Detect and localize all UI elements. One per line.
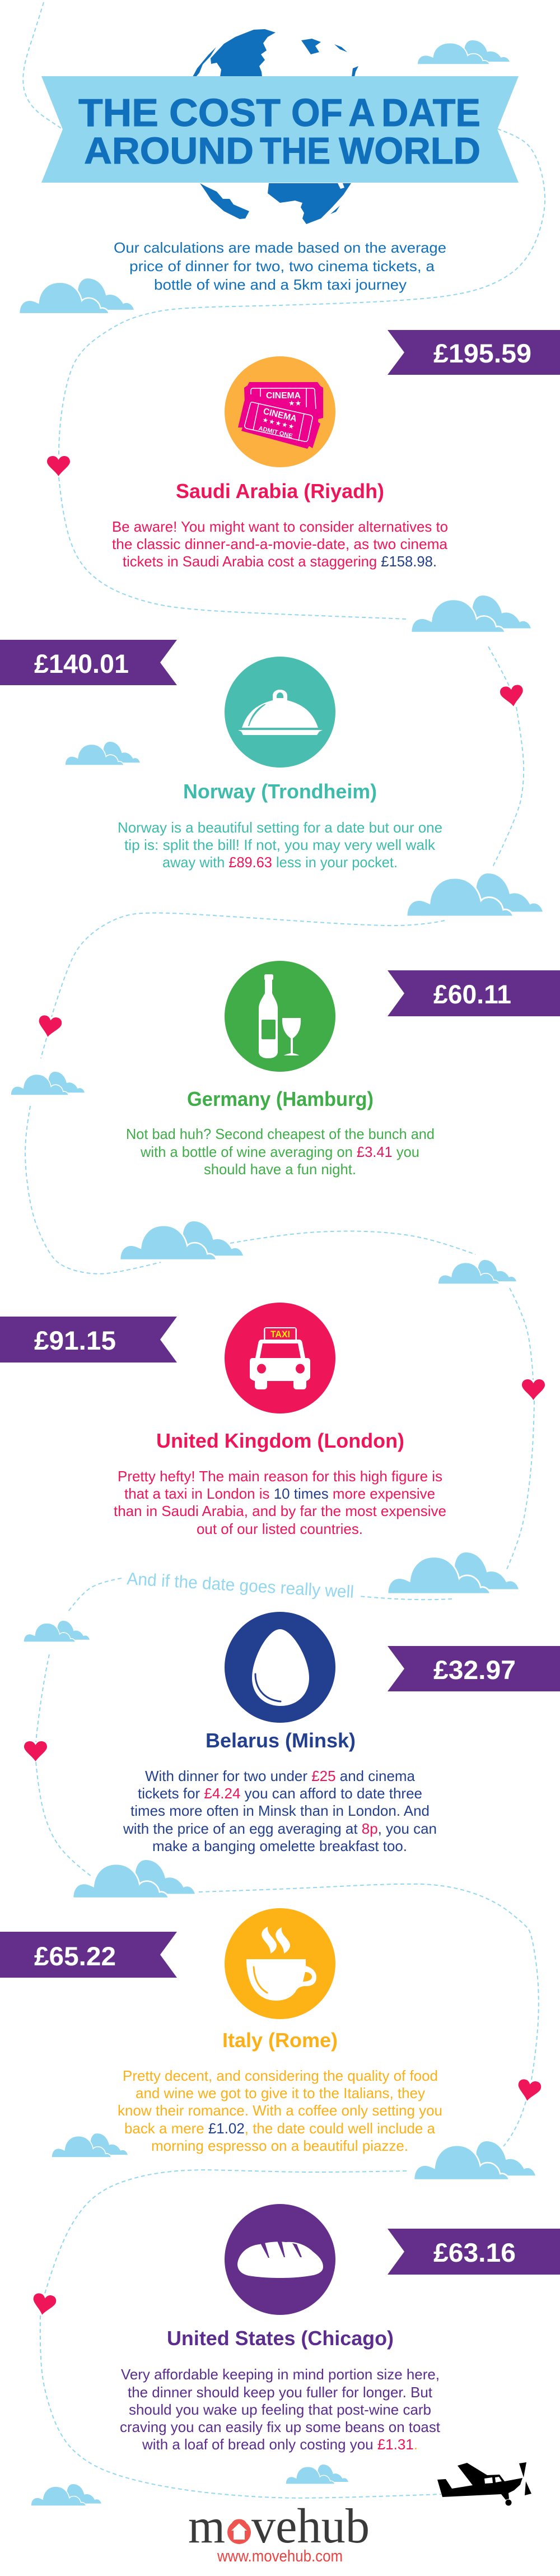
price ribbon [0,640,177,685]
icon: heart [500,684,525,708]
title: WORLD [339,130,480,172]
body text: craving you can easily fix up some beans on toast [120,2419,441,2435]
body text: With dinner for two under £25 and cinema [145,1768,416,1784]
title banner [41,76,519,183]
title: OF [291,91,343,134]
icon: globe [193,29,358,224]
body text: with a bottle of wine averaging on £3.41 you [140,1143,419,1160]
price ribbon: £63.16 [433,2238,516,2267]
icon: cinema tickets: ★★ [288,399,301,408]
price ribbon: £60.11 [433,979,511,1009]
body text: and wine we got to give it to the Italians, they [136,2085,425,2101]
cloud [411,596,531,633]
body text: morning espresso on a beautiful piazze. [151,2137,408,2154]
icon: plane [437,2462,531,2505]
panel: Italy [0,1908,442,2154]
intro text: Our calculations are made based on the average [114,239,446,256]
title: COST [169,91,281,134]
body text: know their romance. With a coffee only setting you [118,2102,442,2119]
website url: www.movehub.com [217,2547,343,2565]
title: DATE [381,91,480,134]
price ribbon: £140.01 [34,649,129,678]
heading: United Kingdom (London) [156,1429,404,1452]
price ribbon [388,970,560,1016]
cloud [388,1552,519,1594]
panel: Germany [126,961,560,1178]
intro text: price of dinner for two, two cinema tickets, a [129,258,435,275]
title [78,91,480,172]
body text: tickets for £4.24 you can afford to date three [138,1785,422,1802]
icon: heart [24,1741,47,1761]
price ribbon [388,330,560,375]
heading: Norway (Trondheim) [183,780,377,803]
cloud [24,1621,90,1642]
body text: Pretty decent, and considering the quality of food [123,2067,438,2084]
body text: out of our listed countries. [197,1521,363,1537]
body text [118,819,442,871]
price ribbon [0,1317,177,1363]
logo: movehub: vehub [251,2499,370,2554]
icon: heart [36,1015,63,1039]
body text: times more often in Minsk than in London. And [130,1802,430,1819]
heading: United States (Chicago) [167,2327,394,2350]
icon: wine bottle and glass [225,961,335,1072]
cloud [73,1860,195,1898]
body text: that a taxi in London is 10 times more expensive [124,1485,435,1502]
body text: tickets in Saudi Arabia cost a staggering £158.98. [123,553,437,570]
body text: back a mere £1.02, the date could well include a [124,2120,436,2137]
body text: away with £89.63 less in your pocket. [162,854,398,871]
body text [118,2067,442,2154]
icon: heart [31,2293,57,2317]
cloud [438,1260,516,1284]
icon: cinema tickets [225,356,335,467]
logo: movehub [188,2499,370,2554]
body text: should have a fun night. [204,1161,356,1178]
price ribbon: £32.97 [433,1655,516,1685]
icon: cloche [225,657,335,768]
panel: United States [120,2204,560,2453]
body text: Be aware! You might want to consider alternatives to [112,518,448,535]
icon: heart [522,1379,545,1400]
icon: heart [47,456,70,476]
body text: make a banging omelette breakfast too. [152,1838,407,1854]
heading: Belarus (Minsk) [206,1729,356,1752]
cloud [286,2465,348,2484]
body text: Norway is a beautiful setting for a date but our one [118,819,442,836]
body text: the classic dinner-and-a-movie-date, as two cinema [112,536,448,552]
intro text: bottle of wine and a 5km taxi journey [154,276,407,293]
body text: with the price of an egg averaging at 8p, you can [123,1820,437,1837]
heading: Italy (Rome) [222,2029,338,2052]
icon: cinema tickets: ADMIT ONE [258,425,293,440]
price ribbon [0,1932,177,1978]
cloud [11,1072,85,1095]
body text: Not bad huh? Second cheapest of the bunch and [126,1126,435,1142]
panel: Saudi Arabia [112,330,560,570]
cloud [65,742,140,765]
logo: movehub: m [188,2499,225,2554]
price ribbon: £65.22 [34,1941,116,1971]
price ribbon: £195.59 [433,338,531,368]
body text: tip is: split the bill! If not, you may very well walk [124,836,436,853]
title: THE [260,130,330,172]
logo: movehub: o [228,2499,250,2554]
cloud [52,2133,128,2157]
heading: Germany (Hamburg) [187,1087,374,1110]
body text [112,518,448,570]
icon: heart [516,2079,542,2103]
icon: cinema tickets: CINEMA [266,391,301,401]
body text: than in Saudi Arabia, and by far the most expensive [114,1503,446,1519]
title: A [348,91,375,134]
cloud [19,278,134,314]
icon: loaf of bread [225,2204,335,2315]
curved caption: And if the date goes really well [127,1569,354,1602]
body text: Pretty hefty! The main reason for this high figure is [118,1468,442,1485]
body text [123,1768,437,1854]
icon: cinema tickets: ★★★★★ [262,416,295,431]
body text: should you wake up feeling that post-wine carb [129,2401,431,2418]
body text: the dinner should keep you fuller for longer. But [128,2384,433,2401]
icon: taxi [225,1303,335,1413]
price ribbon [388,2229,560,2275]
price ribbon: £91.15 [34,1326,116,1355]
icon: taxi: TAXI [270,1329,290,1340]
price ribbon [388,1646,560,1691]
cloud [417,40,510,64]
cloud [407,873,543,917]
panel: Norway [0,640,442,871]
panel: United Kingdom [0,1303,446,1537]
cloud [31,2484,101,2506]
icon: egg [225,1612,335,1723]
body text [120,2366,441,2453]
panel: Belarus [123,1612,560,1854]
icon: coffee cup [225,1908,335,2019]
title: THE [78,91,158,134]
cloud [120,1221,243,1260]
title: AROUND [84,130,254,172]
body text [114,1468,446,1537]
intro text [114,239,446,293]
body text: with a loaf of bread only costing you £1.31. [142,2436,418,2453]
body text [126,1126,435,1178]
body text: Very affordable keeping in mind portion size here, [121,2366,440,2383]
icon: cinema tickets: CINEMA [262,407,298,424]
heading: Saudi Arabia (Riyadh) [176,480,384,503]
cloud [414,2141,535,2180]
